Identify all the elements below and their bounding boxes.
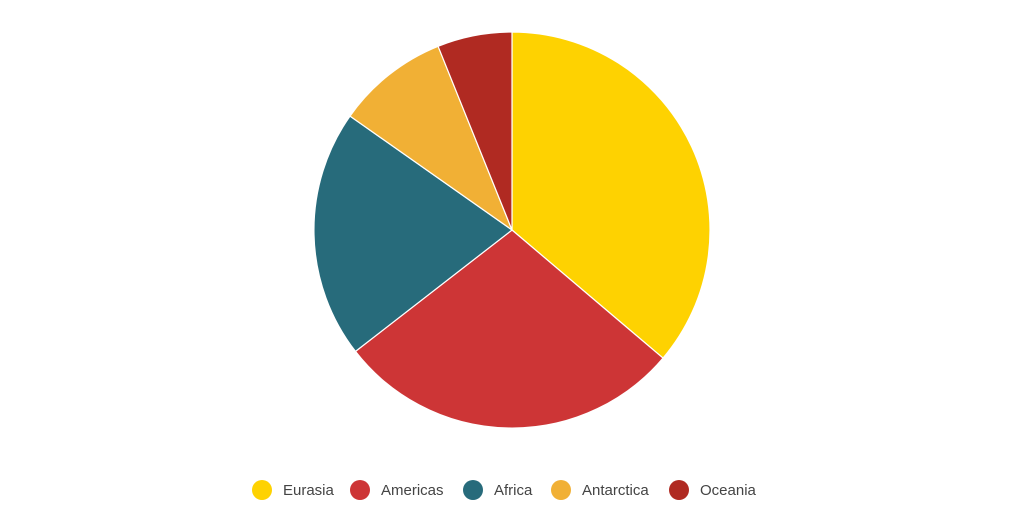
legend: Eurasia: Eurasia [283,482,335,499]
legend: Oceania: Oceania [700,482,757,499]
pie chart [314,32,710,428]
legend [252,480,757,500]
slice: Eurasia [512,32,710,358]
legend: Antarctica: Antarctica [582,482,649,499]
legend: Oceania [669,480,757,500]
legend: Africa: Africa [494,482,533,499]
slice: Africa [314,116,512,351]
legend: Americas [350,480,444,500]
slice: Americas [356,230,663,428]
slice: Oceania [438,32,512,230]
legend: Africa [463,480,533,500]
legend: Eurasia [252,480,335,500]
legend: Antarctica [551,480,649,500]
legend: Americas: Americas [381,482,444,499]
slice: Antarctica [350,46,512,230]
